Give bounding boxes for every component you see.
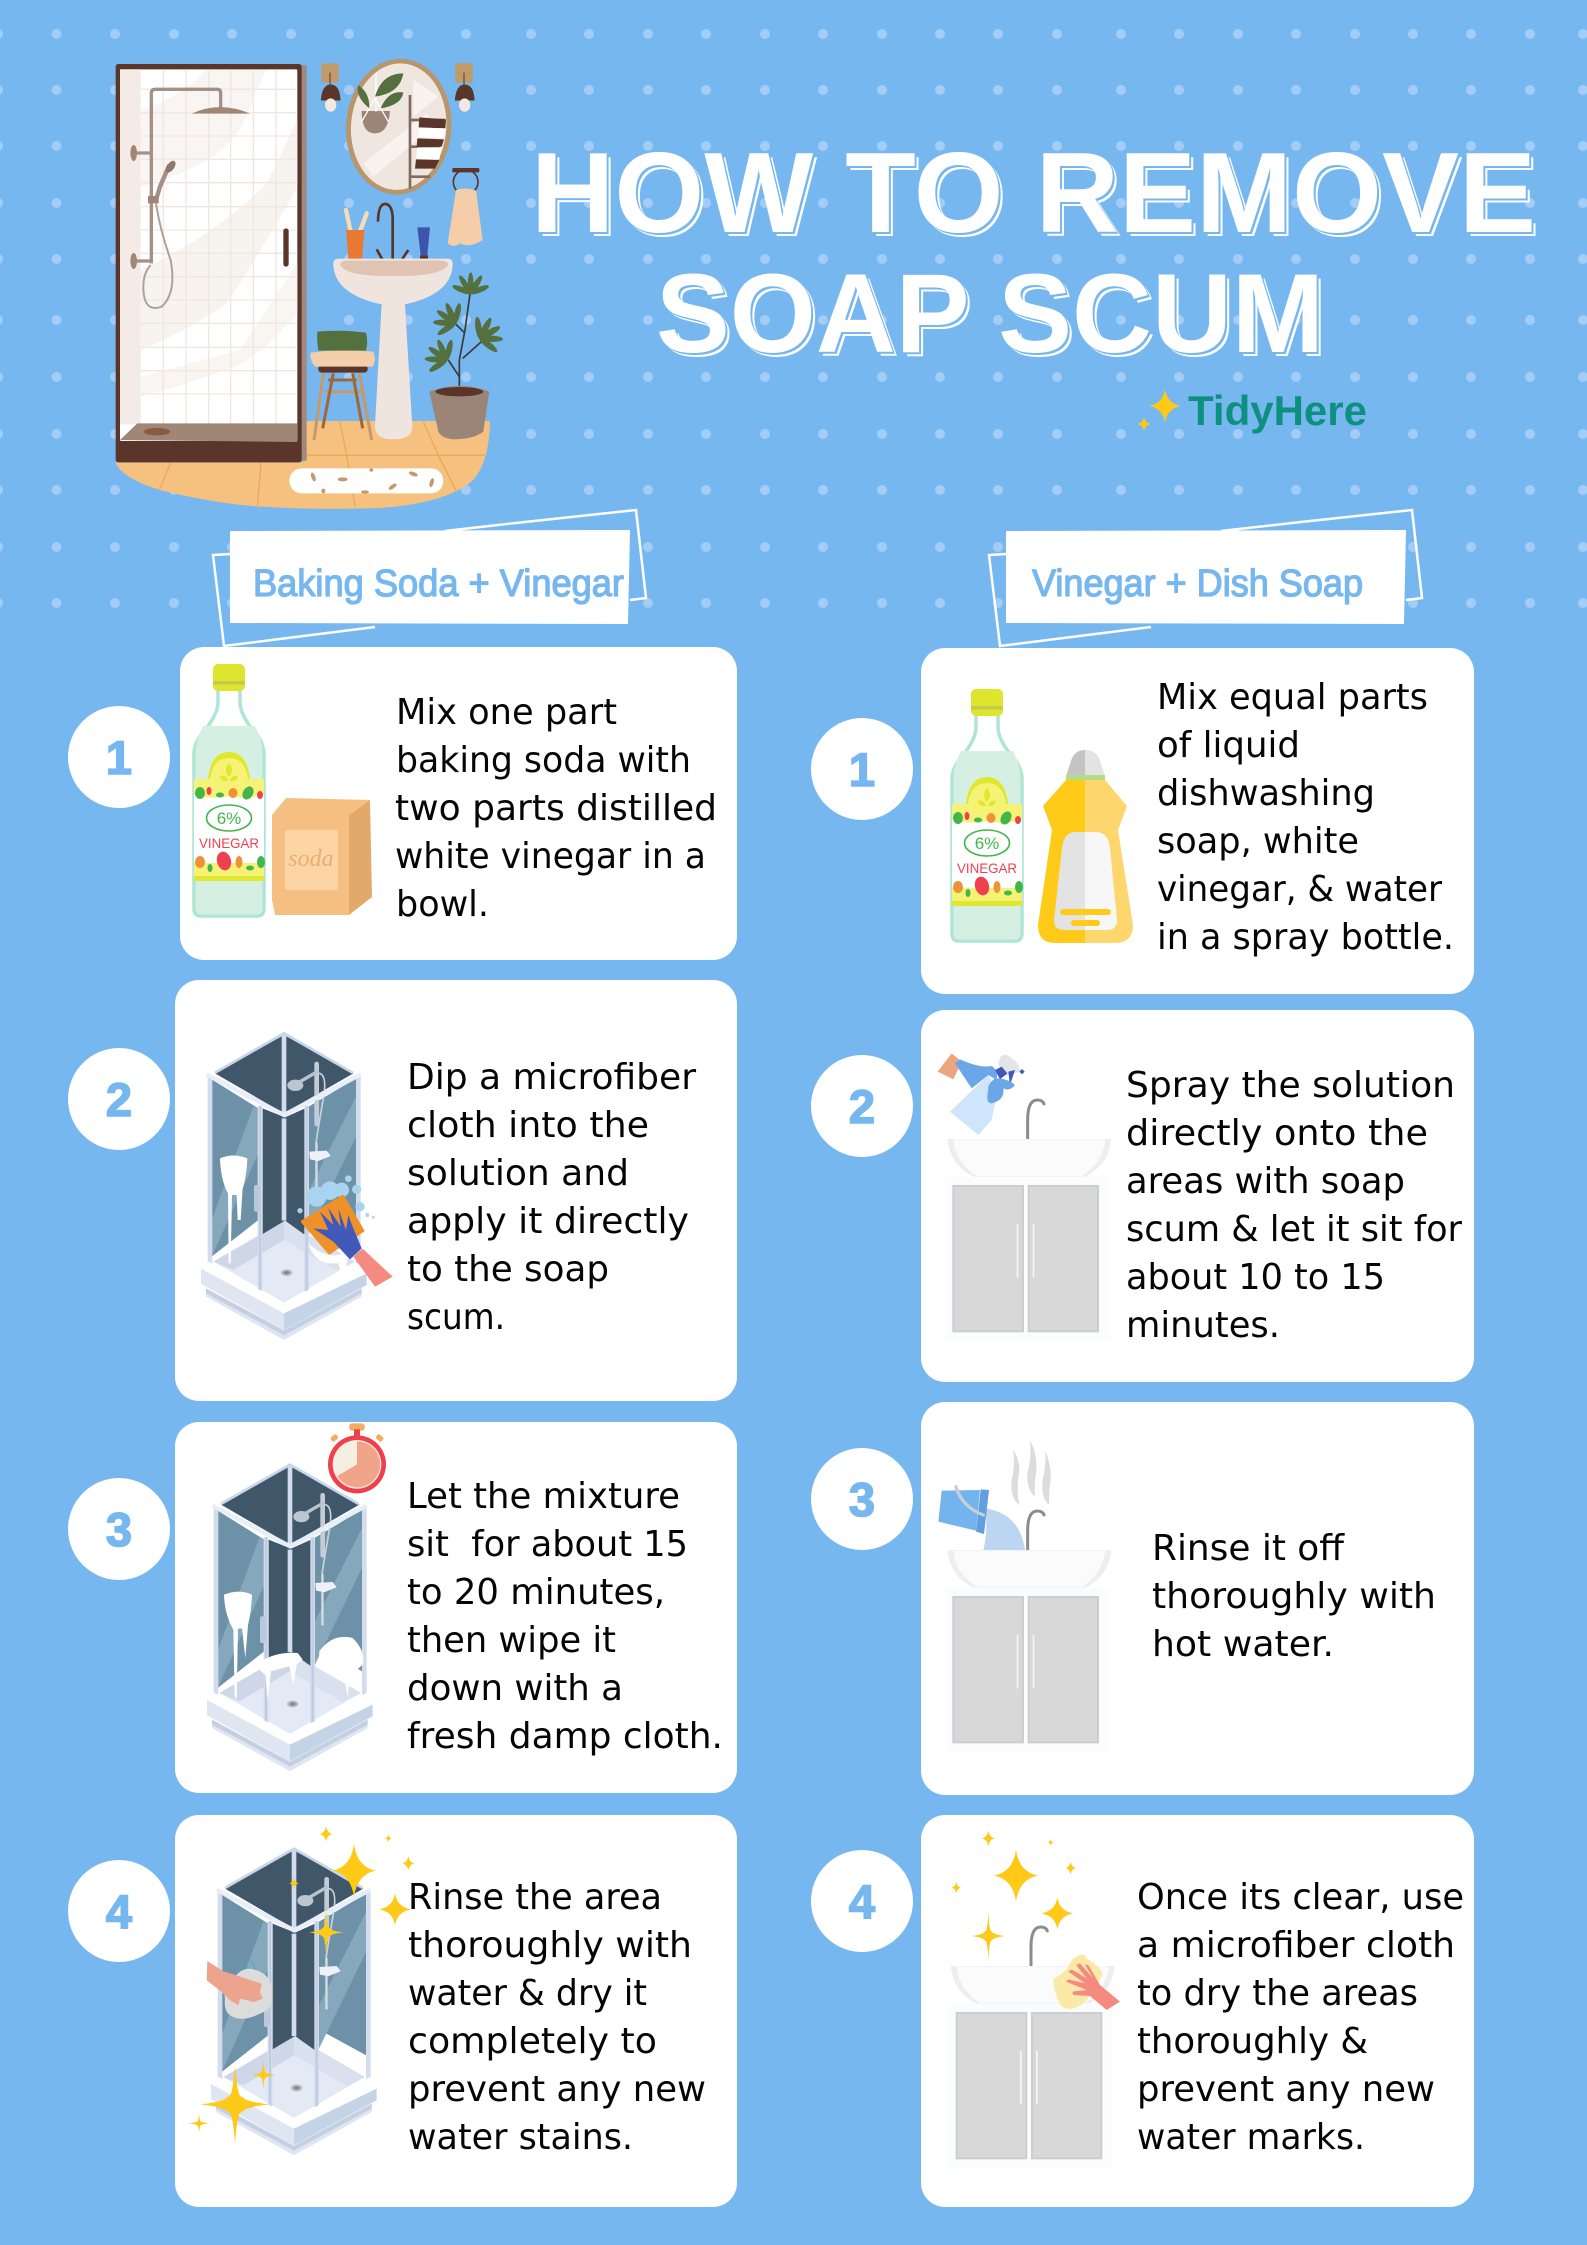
text: left step 3: sit for about 15 <box>407 1524 688 1565</box>
text: left step 3: Let the mixture <box>407 1476 680 1517</box>
icon: clean sink with hand <box>948 1927 1120 2168</box>
text: left step 3: to 20 minutes, <box>407 1572 665 1613</box>
text: right step 2: directly onto the <box>1126 1113 1428 1154</box>
number badge: left 3 <box>68 1478 170 1580</box>
title line 2: SOAP SCUM <box>656 251 1324 376</box>
heading: Baking Soda + Vinegar: Baking Soda + Vinegar <box>253 563 624 605</box>
number badge: right 4: 4 <box>849 1875 875 1928</box>
icon: clean shower with hand <box>207 1849 377 2155</box>
icon: soda box <box>272 798 372 915</box>
stool with towels <box>310 331 375 440</box>
wall lamps <box>321 63 474 112</box>
text: left step 2: apply it directly <box>407 1201 689 1242</box>
title line 1: HOW TO REMOVE <box>533 132 1538 259</box>
mirror <box>341 55 456 198</box>
text: left step 3 <box>407 1476 723 1757</box>
text: right step 4: Once its clear, use <box>1137 1877 1464 1918</box>
text: left step 4 <box>408 1877 706 2158</box>
number badge: left 4 <box>68 1860 170 1962</box>
icon: sparkles <box>952 1830 1076 1959</box>
panel: right step 4 <box>921 1815 1474 2207</box>
floor <box>116 421 490 509</box>
text: left step 4: prevent any new <box>408 2069 706 2110</box>
pedestal sink <box>333 259 453 439</box>
text: right step 1: vinegar, & water <box>1157 869 1442 910</box>
towel ring <box>448 168 483 246</box>
faucet <box>377 204 408 260</box>
text: right step 3 <box>1152 1528 1436 1665</box>
text: left step 1: two parts distilled <box>395 788 717 829</box>
icon: dish soap bottle <box>1038 750 1133 943</box>
text: right step 1: dishwashing <box>1157 773 1375 814</box>
illustration: bathroom scene <box>116 55 511 509</box>
text: left step 2: solution and <box>407 1153 629 1194</box>
number badge: left 4: 4 <box>106 1885 132 1938</box>
text: left step 4: water stains. <box>408 2117 633 2158</box>
icon: vinegar bottle <box>194 664 265 916</box>
text: right step 2: areas with soap <box>1126 1161 1405 1202</box>
text: right step 2 <box>1126 1065 1462 1346</box>
text: right step 2: Spray the solution <box>1126 1065 1455 1106</box>
text: right step 1 <box>1157 677 1454 958</box>
number badge: right 2 <box>811 1055 913 1157</box>
text: right step 2: scum & let it sit for <box>1126 1209 1462 1250</box>
icon: sink with spray <box>938 1053 1111 1341</box>
bath mat <box>289 468 443 494</box>
number badge: right 3 <box>811 1448 913 1550</box>
text: right step 1: in a spray bottle. <box>1157 917 1454 958</box>
number badge: left 2: 2 <box>106 1073 132 1126</box>
toothbrush cup and tube <box>346 210 430 260</box>
title line 2: SOAP SCUM <box>658 253 1326 378</box>
number badge: left 2 <box>68 1048 170 1150</box>
number badge: right 4 <box>811 1850 913 1952</box>
text: left step 4: completely to <box>408 2021 657 2062</box>
icon: soda box: soda <box>288 846 334 872</box>
heading: Vinegar + Dish Soap: Vinegar + Dish Soap <box>1032 563 1363 605</box>
icon: vinegar bottle <box>952 689 1023 941</box>
text: left step 2: scum. <box>407 1297 505 1338</box>
text: left step 1: baking soda with <box>396 740 691 781</box>
text: right step 4 <box>1137 1877 1464 2158</box>
number badge: right 2: 2 <box>849 1080 875 1133</box>
text: left step 4: thoroughly with <box>408 1925 692 1966</box>
text: left step 1: bowl. <box>396 884 489 925</box>
number badge: left 1: 1 <box>106 731 132 784</box>
text: left step 3: down with a <box>407 1668 623 1709</box>
text: right step 3: thoroughly with <box>1152 1576 1436 1617</box>
title line 1: HOW TO REMOVE <box>535 134 1540 261</box>
title line 1: HOW TO REMOVE <box>531 130 1536 257</box>
panel: right step 1 <box>921 648 1474 994</box>
shower cabin <box>116 64 307 462</box>
text: left step 2: Dip a microfiber <box>407 1057 696 1098</box>
icon: shower with scum <box>207 1465 373 1771</box>
text: right step 4: a microfiber cloth <box>1137 1925 1455 1966</box>
logo: TidyHere: TidyHere <box>1188 387 1367 434</box>
text: left step 4: Rinse the area <box>408 1877 662 1918</box>
number badge: left 1 <box>68 706 170 808</box>
text: left step 2: cloth into the <box>407 1105 649 1146</box>
icon: stopwatch <box>328 1423 386 1493</box>
potted plant <box>417 272 511 439</box>
number badge: right 1: 1 <box>849 743 875 796</box>
text: right step 1: of liquid <box>1157 725 1300 766</box>
text: left step 3: then wipe it <box>407 1620 616 1661</box>
text: left step 4: water & dry it <box>408 1973 647 2014</box>
text: right step 1: Mix equal parts <box>1157 677 1428 718</box>
panel: left step 2 <box>175 980 737 1401</box>
text: right step 4: thoroughly & <box>1137 2021 1368 2062</box>
text: right step 4: water marks. <box>1137 2117 1365 2158</box>
text: left step 1: white vinegar in a <box>395 836 706 877</box>
text: left step 1: Mix one part <box>396 692 617 733</box>
heading: Vinegar + Dish Soap <box>989 510 1422 646</box>
text: right step 1: soap, white <box>1157 821 1359 862</box>
text: right step 2: minutes. <box>1126 1305 1280 1346</box>
text: left step 1 <box>395 692 717 925</box>
panel: right step 3 <box>921 1402 1474 1795</box>
text: right step 4: prevent any new <box>1137 2069 1435 2110</box>
panel: right step 2 <box>921 1010 1474 1382</box>
heading: Baking Soda + Vinegar <box>213 510 646 646</box>
text: right step 4: to dry the areas <box>1137 1973 1418 2014</box>
panel: left step 1 <box>180 647 737 960</box>
icon: shower with sponge <box>201 1033 393 1340</box>
number badge: right 1 <box>811 718 913 820</box>
text: left step 3: fresh damp cloth. <box>407 1716 723 1757</box>
icon: sparkles <box>188 1826 414 2144</box>
number badge: left 3: 3 <box>106 1503 132 1556</box>
icon: sink with bucket and steam <box>938 1440 1111 1752</box>
text: right step 2: about 10 to 15 <box>1126 1257 1385 1298</box>
number badge: right 3: 3 <box>849 1473 875 1526</box>
text: right step 3: Rinse it off <box>1152 1528 1346 1569</box>
text: left step 2: to the soap <box>407 1249 609 1290</box>
title line 2: SOAP SCUM <box>660 255 1328 380</box>
text: right step 3: hot water. <box>1152 1624 1334 1665</box>
title <box>531 130 1540 380</box>
panel: left step 3 <box>175 1422 737 1793</box>
panel: left step 4 <box>175 1815 737 2207</box>
text: left step 2 <box>407 1057 696 1338</box>
